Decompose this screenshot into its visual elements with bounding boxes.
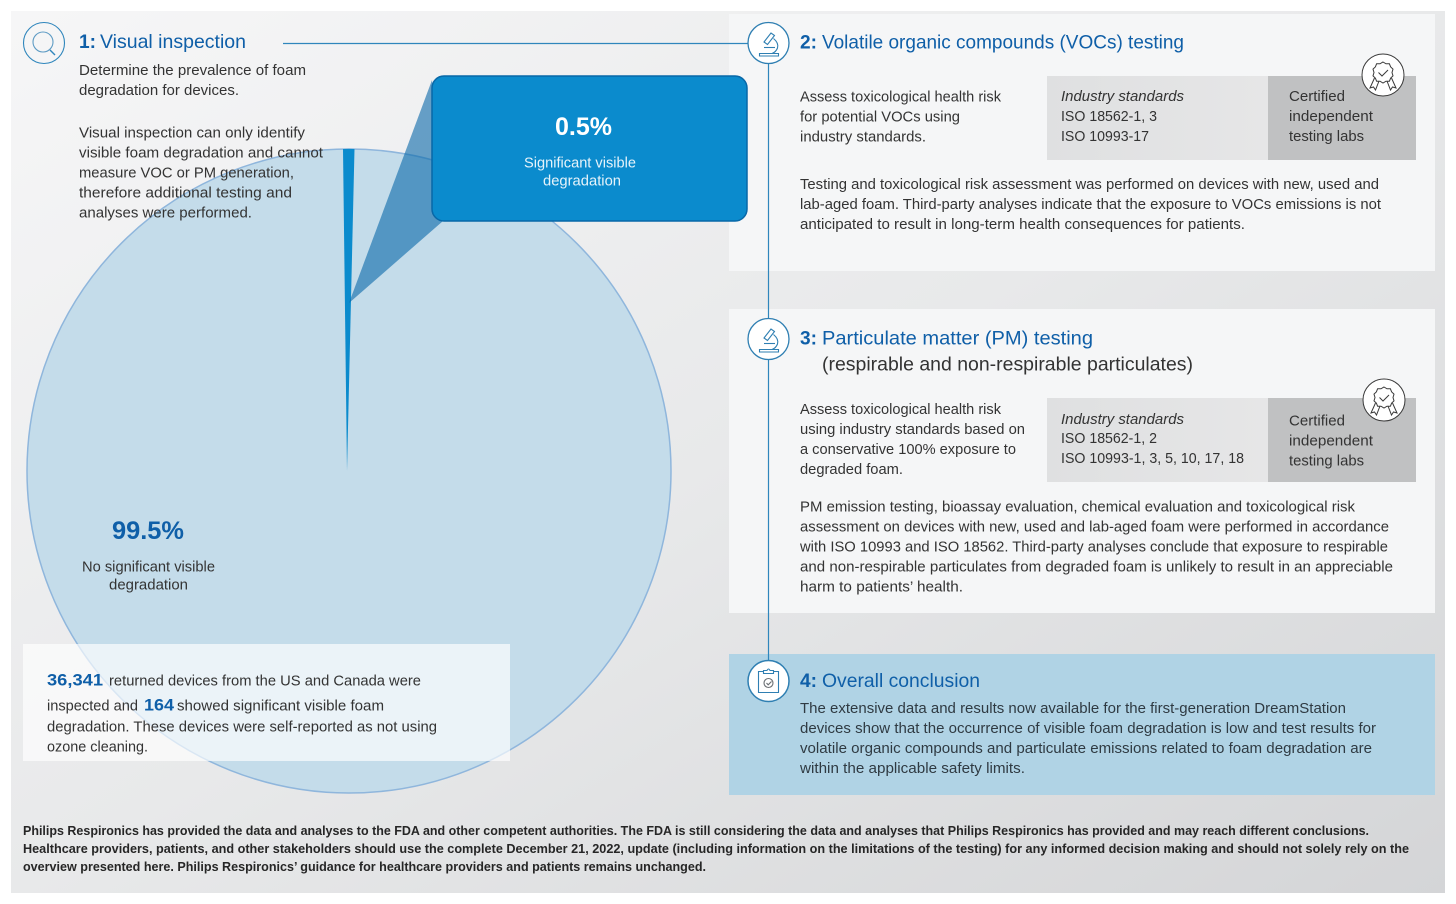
text box: returned devices statistics: showed significant visible foam: [177, 698, 384, 714]
text: VOC testing findings: Testing and toxicological risk assessment was performed on devices with new, used and: [800, 176, 1379, 193]
text: overall conclusion body: The extensive data and results now available for the first-generation DreamStation: [800, 700, 1346, 717]
text: PM assessment summary: degraded foam.: [800, 461, 903, 478]
heading: PM testing: [800, 328, 1193, 376]
text: PM testing findings: assessment on devices with new, used and lab-aged foam were performed in accordance: [800, 518, 1389, 536]
box: VOC industry standards: ISO 10993-17: [1061, 128, 1149, 145]
text box: returned devices statistics: degradation. These devices were self-reported as not using: [47, 718, 437, 736]
box: PM certified labs: Certified: [1289, 412, 1345, 430]
icon: certification rosette: [1363, 379, 1405, 421]
text: visual inspection description: Determine the prevalence of foam: [79, 62, 306, 79]
text: PM testing findings: PM emission testing, bioassay evaluation, chemical evaluation and toxicological risk: [800, 498, 1355, 516]
box: PM industry standards: Industry standards: [1061, 411, 1184, 428]
text: VOC assessment summary: Assess toxicological health risk: [800, 88, 1001, 106]
callout: 0.5 percent significant degradation: degradation: [543, 172, 621, 190]
box: VOC industry standards: ISO 18562-1, 3: [1061, 108, 1157, 125]
label: 99.5 percent no significant degradation: degradation: [109, 576, 188, 594]
text: overall conclusion body: [799, 700, 1376, 777]
label: 99.5 percent no significant degradation: No significant visible: [82, 558, 215, 576]
text: VOC testing findings: [800, 176, 1382, 233]
heading: visual inspection: 1:: [79, 31, 96, 53]
heading: overall conclusion: 4:: [800, 670, 817, 692]
callout: 0.5 percent significant degradation: [432, 76, 747, 221]
text box: returned devices statistics: inspected and: [47, 698, 138, 714]
connector lines between steps: [283, 44, 768, 660]
box: PM industry standards: [1047, 398, 1268, 482]
panel: overall conclusion background: [729, 654, 1435, 795]
text: visual inspection description: analyses were performed.: [79, 204, 252, 222]
footer disclaimer: Philips Respironics has provided the data and analyses to the FDA and other competent authorities. The FDA is still considering the data and analyses that Philips Respironics has provided and may reach different conclusions.: [23, 824, 1369, 838]
panel: VOC testing: [748, 22, 1416, 233]
footer disclaimer: overview presented here. Philips Respironics’ guidance for healthcare providers and patients remains unchanged.: [23, 860, 706, 874]
text: visual inspection description: measure VOC or PM generation,: [79, 164, 294, 182]
text: VOC assessment summary: for potential VOCs using: [800, 108, 960, 126]
text box: returned devices statistics: returned devices from the US and Canada were: [109, 672, 421, 690]
text: PM assessment summary: [800, 401, 1025, 478]
text: visual inspection description: [79, 62, 324, 222]
text: visual inspection description: degradation for devices.: [79, 82, 239, 99]
box: VOC certified labs: independent: [1289, 108, 1374, 125]
text: PM testing findings: harm to patients’ health.: [800, 578, 963, 596]
label: 99.5 percent no significant degradation: [82, 517, 215, 594]
icon: magnifying glass: [24, 22, 64, 64]
text: visual inspection description: therefore additional testing and: [79, 184, 292, 202]
text: overall conclusion body: devices show that the occurrence of visible foam degradation is low and test results for: [800, 720, 1376, 737]
panel: PM testing: [748, 318, 1416, 596]
text: VOC assessment summary: industry standards.: [800, 128, 926, 146]
panel: visual inspection: [24, 22, 324, 222]
footer disclaimer: [23, 824, 1409, 874]
text: VOC assessment summary: [800, 88, 1001, 146]
box: VOC certified labs: testing labs: [1289, 128, 1364, 145]
text: PM testing findings: and non-respirable particulates from degraded foam is unlikely to result in an appreciable: [800, 558, 1393, 576]
callout: 0.5 percent significant degradation: Significant visible: [524, 154, 636, 172]
text: overall conclusion body: volatile organic compounds and particulate emissions related to foam degradation are: [800, 740, 1372, 757]
heading: PM testing: Particulate matter (PM) testing: [822, 328, 1093, 350]
box: VOC industry standards: Industry standards: [1061, 88, 1184, 105]
text: VOC testing findings: anticipated to result in long-term health consequences for patients.: [800, 216, 1245, 233]
text box: returned devices statistics: [23, 644, 510, 761]
box: VOC industry standards: [1047, 76, 1268, 160]
text: overall conclusion body: within the applicable safety limits.: [799, 760, 1025, 777]
callout connector wedge: [349, 80, 443, 303]
text: PM assessment summary: a conservative 100% exposure to: [800, 441, 1016, 458]
box: VOC certified labs: [1268, 76, 1416, 160]
icon: microscope: [748, 22, 789, 64]
text: PM testing findings: [799, 498, 1393, 596]
pie chart: visible foam degradation: [27, 149, 671, 793]
label: 99.5 percent no significant degradation: 99.5%: [112, 517, 184, 545]
text: VOC testing findings: lab-aged foam. Third-party analyses indicate that the exposure to VOCs emissions is not: [800, 196, 1382, 213]
icon: clipboard with check: [748, 660, 789, 702]
text: PM assessment summary: Assess toxicological health risk: [800, 401, 1001, 418]
text: PM testing findings: with ISO 10993 and ISO 18562. Third-party analyses conclude that exposure to respirable: [799, 538, 1388, 556]
text: visual inspection description: Visual inspection can only identify: [79, 124, 305, 142]
heading: VOC testing: Volatile organic compounds (VOCs) testing: [822, 32, 1184, 54]
panel: VOC testing background: [729, 14, 1435, 271]
footer disclaimer: Healthcare providers, patients, and other stakeholders should use the complete December 21, 2022, update (including information on the limitations of the testing) for any informed decision making and should not solely rely on the: [23, 842, 1409, 856]
text box: returned devices statistics: ozone cleaning.: [47, 738, 148, 756]
heading: PM testing: (respirable and non-respirable particulates): [822, 354, 1193, 376]
box: PM industry standards: ISO 18562-1, 2: [1061, 430, 1157, 447]
box: PM certified labs: independent: [1289, 432, 1374, 450]
text: visual inspection description: visible foam degradation and cannot: [79, 144, 324, 162]
box: PM certified labs: testing labs: [1289, 452, 1364, 470]
box: VOC certified labs: Certified: [1289, 88, 1345, 105]
icon: microscope: [748, 318, 789, 360]
panel: PM testing background: [729, 309, 1435, 613]
icon: certification rosette: [1362, 54, 1404, 96]
callout: 0.5 percent significant degradation: 0.5%: [555, 113, 612, 141]
panel: overall conclusion: [748, 660, 1376, 777]
text: PM assessment summary: using industry standards based on: [800, 421, 1025, 438]
heading: PM testing: 3:: [800, 328, 817, 350]
text box: returned devices statistics: 164: [144, 696, 175, 714]
box: PM industry standards: ISO 10993-1, 3, 5, 10, 17, 18: [1061, 450, 1244, 467]
heading: visual inspection: Visual inspection: [100, 31, 246, 53]
heading: overall conclusion: Overall conclusion: [822, 670, 980, 692]
heading: VOC testing: 2:: [800, 32, 817, 54]
text box: returned devices statistics: 36,341: [47, 670, 103, 690]
box: PM certified labs: [1268, 398, 1416, 482]
